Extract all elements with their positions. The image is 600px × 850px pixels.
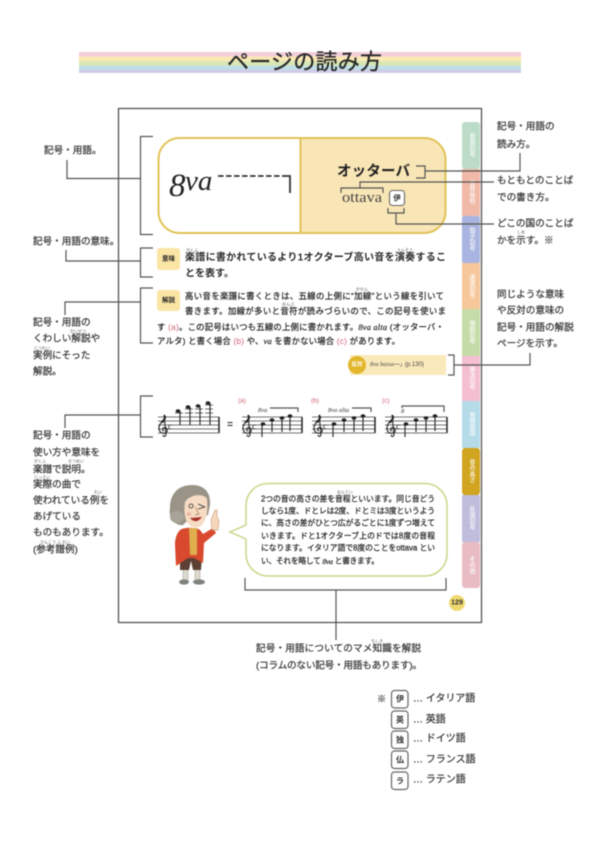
staff: original notation: c (168, 421, 172, 431)
index tabs: 音部記号 (468, 132, 475, 158)
arrow: language (388, 208, 494, 224)
title banner: ページの読み方 (227, 50, 382, 74)
legend: language abbreviations: … ドイツ語 (413, 732, 466, 744)
legend: language abbreviations: ラ (396, 776, 404, 786)
meaning row (157, 246, 446, 280)
label: notation example: がくふ (34, 458, 46, 464)
index tabs: 音符休符 (468, 179, 475, 204)
badge: explanation (157, 290, 180, 311)
legend: language abbreviations: ※ (377, 694, 386, 704)
label: related term: や反対の意味の (497, 304, 564, 316)
explanation text: 高い音を楽譜に書くときは、五線の上側に“加線”という線を引いて (185, 291, 444, 301)
label: related term: 記号・用語の解説 (497, 322, 574, 334)
related-term tag (348, 355, 446, 375)
label: original spelling: での書き方。 (497, 192, 555, 204)
stockings and shoes (183, 568, 200, 581)
label: original spelling (497, 176, 574, 204)
legend: language abbreviations: … ラテン語 (413, 774, 466, 786)
staff (b): (b) (311, 398, 319, 404)
symbol 8va (169, 165, 290, 204)
language icon: 伊 (393, 192, 401, 202)
label: language: しめ (517, 230, 525, 234)
label: column: ちしき (371, 638, 383, 644)
legend: language abbreviations: 独 (396, 734, 404, 744)
speech bubble: い、それを略して 8va と書きます。 (261, 556, 379, 566)
label: language: かを示す。※ (497, 236, 554, 246)
label: explanation: じつれい (34, 344, 50, 350)
breeches (180, 555, 202, 570)
badge: meaning (157, 248, 180, 270)
legend: language abbreviations: … 英語 (413, 712, 446, 726)
meaning text: がくふ (186, 246, 198, 252)
label: explanation: 記号・用語の (33, 318, 91, 328)
label: column: (コラムのない記号・用語もあります)。 (256, 660, 422, 672)
legend: language abbreviations: 英 (396, 714, 404, 724)
staff (a): c (252, 421, 256, 431)
explanation row (157, 286, 446, 346)
label: notation example: 楽譜で説明。 (33, 464, 91, 476)
label: notation example: さんこう ふ れい (40, 538, 70, 544)
meaning text (185, 246, 446, 280)
legend: language abbreviations: 伊 (396, 694, 404, 704)
label: related term: ページを示す。 (497, 338, 563, 350)
bracket: notation example (65, 396, 153, 437)
raised hand (211, 510, 219, 530)
explanation text: かせん (356, 286, 368, 292)
bracket: explanation (65, 288, 153, 343)
vest (189, 528, 197, 555)
label: notation example: せつめい (68, 458, 84, 464)
label: notation example: 使い方や意味を (33, 446, 100, 458)
page frame (118, 108, 482, 622)
label: related term: 同じような意味 (497, 288, 565, 300)
speech bubble: 2つの音の高さの差を音程といいます。同じ音どう (261, 494, 435, 504)
index tabs: 音の高さ (468, 458, 475, 483)
index tabs: その他 (468, 556, 475, 575)
index tabs: 発想用語 (468, 411, 475, 437)
staff (a): 8va (258, 407, 267, 414)
meaning text: えんそう (397, 246, 413, 252)
label: notation example (33, 430, 109, 556)
speech bubble: しなら1度、ドとレは2度、ドとミは3度というよう (261, 506, 435, 516)
staff (c): (c) (382, 398, 390, 404)
music examples (158, 398, 447, 437)
index tabs (462, 122, 480, 588)
index tabs: 速度記号 (468, 273, 475, 299)
label: explanation: くわしい解説や (33, 332, 100, 344)
symbol 8va: 8 (169, 168, 186, 204)
label: notation example: 実際の曲で (33, 478, 81, 490)
related-term tag: 8va bassa⎯⎯⌋ (p.130) (370, 362, 424, 368)
page number (449, 595, 465, 611)
label: language: どこの国のことば (497, 218, 574, 230)
label: explanation: 実例にそった (33, 350, 90, 362)
equals sign: = (227, 420, 233, 430)
label: language (497, 218, 574, 246)
staff (b) (311, 398, 375, 437)
explanation text (157, 286, 446, 346)
label: notation example: 記号・用語の (33, 430, 91, 442)
label: reading (497, 122, 555, 150)
label: explanation (33, 318, 100, 378)
label: notation example: あげている (33, 512, 81, 522)
label: symbol: 記号・用語。 (44, 146, 102, 156)
label: explanation: 解説。 (33, 366, 62, 378)
bracket: meaning (66, 248, 153, 277)
badge: explanation: 解説 (162, 295, 176, 304)
page number: 129 (451, 600, 463, 606)
label: column: 記号・用語についてのマメ知識を解説 (256, 642, 421, 654)
meaning text: とを表す。 (185, 266, 234, 280)
character: Mozart pointing (170, 485, 219, 585)
index tabs: 奏法記号 (468, 365, 475, 391)
wig (170, 485, 210, 525)
label: notation example: れい (94, 488, 102, 494)
explanation text: す (a)。この記号はいつも五線の上側に書かれます。8va alta (オッターバ・ (157, 322, 444, 332)
language icon (390, 190, 404, 206)
arrow: related term (448, 353, 530, 375)
staff (b): 8va alta (328, 407, 349, 414)
panel: symbol card (158, 138, 446, 233)
speech bubble: になります。イタリア語で8度のことをottava とい (261, 542, 435, 552)
staff (c): c (396, 421, 400, 431)
label: column (256, 638, 422, 672)
badge: meaning: 意味 (162, 254, 176, 262)
label: notation example: 使われている例を (33, 494, 109, 506)
label: notation example: じっさい (34, 474, 50, 480)
legend: language abbreviations (377, 690, 476, 790)
face (184, 495, 207, 527)
staff (c): 8 (401, 408, 405, 415)
bracket: symbol (67, 136, 153, 234)
explanation text: アルタ) と書く場合 (b) や、va を書かない場合 (c) があります。 (157, 336, 400, 346)
label: notation example: ものもあります。 (33, 528, 109, 538)
label: explanation: かいせつ (70, 328, 86, 334)
explanation text: おんぷ (282, 300, 294, 306)
speech bubble (230, 484, 447, 576)
legend: language abbreviations: … フランス語 (413, 754, 476, 766)
staff (a): (a) (238, 398, 246, 404)
speech bubble: に、高さの差がひとつ広がるごとに1度ずつ増えて (261, 518, 435, 528)
explanation text: 書きます。加線が多いと音符が読みづらいので、この記号を使いま (185, 306, 446, 316)
speech bubble: いきます。ドと1オクターブ上のドでは8度の音程 (261, 530, 435, 540)
original spelling: ottava (342, 190, 383, 206)
bracket: column (245, 578, 446, 640)
speech bubble: おんてい (337, 488, 353, 494)
meaning text: 楽譜に書かれているより1オクターブ高い音を演奏するこ (185, 250, 446, 264)
staff (c) (382, 398, 447, 437)
staff (b): c (323, 421, 327, 431)
coat (175, 528, 216, 566)
arrow: reading (416, 153, 520, 178)
related-term tag: 反対 (351, 360, 363, 368)
legend: language abbreviations: … イタリア語 (413, 692, 475, 704)
title banner (79, 50, 521, 74)
label: notation example: (参考譜例) (33, 544, 78, 556)
reading: ottava katakana: オッターバ (337, 163, 410, 180)
index tabs: 拍子記号 (468, 226, 475, 252)
index tabs: 強弱記号 (468, 319, 475, 345)
label: meaning: 記号・用語の意味。 (33, 236, 119, 248)
label: reading: 読み方。 (497, 138, 535, 150)
staff: original notation (158, 401, 219, 436)
label: original spelling: もともとのことば (497, 176, 574, 186)
label: related term (497, 288, 574, 350)
legend: language abbreviations: 仏 (396, 754, 404, 764)
label: reading: 記号・用語の (497, 122, 555, 132)
index tabs: 反復記号 (468, 506, 475, 531)
staff (a) (238, 398, 302, 437)
arrow: original spelling (341, 182, 494, 193)
symbol 8va: va (185, 165, 212, 197)
